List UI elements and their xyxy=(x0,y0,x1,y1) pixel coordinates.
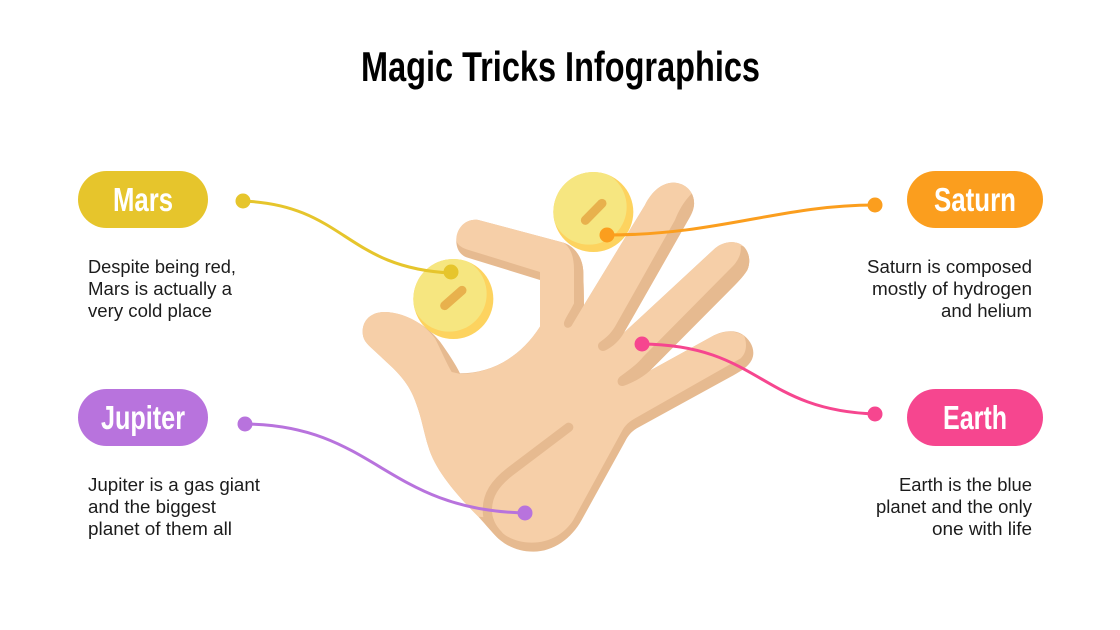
label: Earth: Earth xyxy=(943,399,1007,436)
text: Jupiter description: planet of them all xyxy=(88,519,232,539)
text: Saturn description: and helium xyxy=(941,301,1032,321)
text: Saturn description: Saturn is composed xyxy=(867,257,1032,277)
hand light surface xyxy=(363,183,749,543)
label: Mars xyxy=(78,171,208,228)
connector: Mars xyxy=(236,194,458,280)
text: Saturn description: mostly of hydrogen xyxy=(872,279,1032,299)
text: Jupiter description xyxy=(88,475,260,539)
text: Earth description: one with life xyxy=(932,519,1032,539)
text: Mars description: Mars is actually a xyxy=(88,279,233,299)
connector: Jupiter xyxy=(238,416,532,520)
finger and palm creases xyxy=(487,193,753,535)
text: Earth description: planet and the only xyxy=(876,497,1032,517)
text: Jupiter description: and the biggest xyxy=(88,497,216,517)
connector: Saturn xyxy=(600,198,882,242)
text: Mars description: very cold place xyxy=(88,301,212,321)
text: Saturn description xyxy=(867,257,1032,321)
text: Mars description xyxy=(88,257,236,321)
label: Jupiter xyxy=(78,389,208,446)
text: Earth description: Earth is the blue xyxy=(899,475,1032,495)
icon: hand with coins xyxy=(363,169,753,552)
coin left xyxy=(411,256,493,339)
label: Saturn xyxy=(907,171,1043,228)
label: Jupiter: Jupiter xyxy=(101,399,185,436)
connector: Earth xyxy=(634,336,882,422)
hand shadow silhouette xyxy=(363,183,753,552)
label: Saturn: Saturn xyxy=(934,181,1016,218)
text: Jupiter description: Jupiter is a gas giant xyxy=(88,475,260,495)
coin right xyxy=(551,169,633,252)
label: Mars: Mars xyxy=(113,181,173,218)
label: Earth xyxy=(907,389,1043,446)
title: Magic Tricks Infographics xyxy=(361,43,760,90)
text: Mars description: Despite being red, xyxy=(88,257,236,277)
text: Earth description xyxy=(876,475,1032,539)
